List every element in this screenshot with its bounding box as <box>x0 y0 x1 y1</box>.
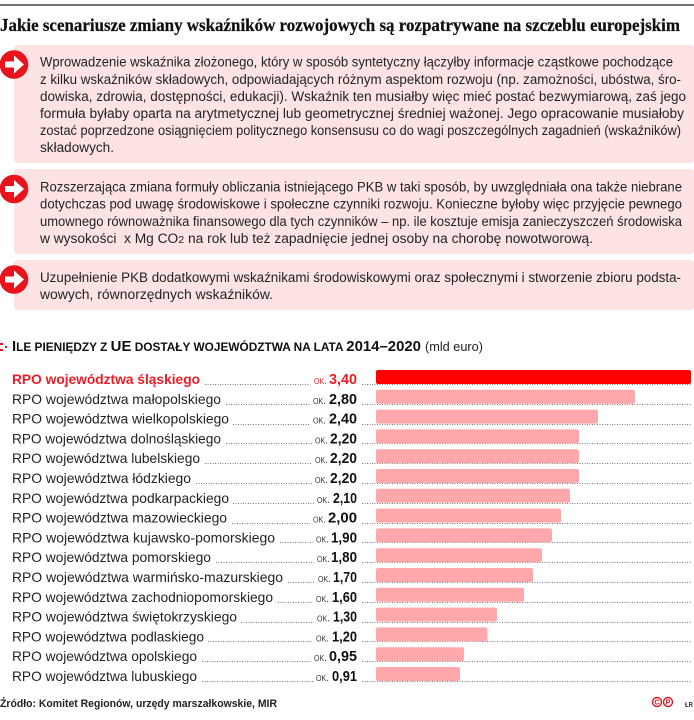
panel: scenario 1 <box>0 45 694 163</box>
row: lubuskie: 0,91 <box>332 668 357 685</box>
text block: scenario 3: Uzupełnienie PKB dodatkowymi wskaźnikami środowiskowymi oraz społecznymi i stworzenie zbioru podsta- <box>40 270 681 285</box>
row: mazowieckie: 2,00 <box>328 510 357 527</box>
row: śląskie: ok. <box>314 375 327 387</box>
row: świętokrzyskie <box>12 608 691 626</box>
row: małopolskie <box>12 390 691 408</box>
icon: red arrow circle 1 <box>0 50 28 79</box>
text block: scenario 1: zostać poprzedzone osiągnięciem politycznego konsensusu co do wagi poszczególnych zagadnień (wskaźników) <box>40 123 681 138</box>
row: zachodniopomorskie: 1,60 <box>332 589 357 606</box>
row: świętokrzyskie: ok. <box>317 613 330 625</box>
row: warmińsko-mazurskie: RPO województwa warmińsko-mazurskiego <box>12 569 283 585</box>
row: pomorskie: ok. <box>317 553 330 565</box>
row: małopolskie: RPO województwa małopolskiego <box>12 391 221 407</box>
logo: CP <box>652 698 672 706</box>
row: opolskie <box>12 647 691 665</box>
row: dolnośląskie: 2,20 <box>330 430 357 447</box>
row: lubelskie: ok. <box>315 454 328 466</box>
row: lubelskie: RPO województwa lubelskiego <box>12 450 200 466</box>
row: lubuskie: RPO województwa lubuskiego <box>12 668 197 684</box>
text block: scenario 1: formuła byłaby oparta na arytmetycznej lub geometrycznej średniej ważonej. Jego opracowanie musiałoby <box>40 106 684 121</box>
row: łódzkie: 2,20 <box>330 470 357 487</box>
row: wielkopolskie: ok. <box>313 415 326 427</box>
text block: scenario 1: Wprowadzenie wskaźnika złożonego, który w sposób syntetyczny łączyłby informacje cząstkowe pochodzące <box>40 54 673 70</box>
text block: scenario 1 <box>40 54 686 155</box>
text block: scenario 2: w wysokości x Mg CO 2 na rok lub też zapadnięcie jednej osoby na chorobę nowotworową. <box>39 231 593 246</box>
icon: section marker <box>0 343 7 351</box>
row: opolskie: ok. <box>314 652 327 664</box>
row: świętokrzyskie: RPO województwa świętokrzyskiego <box>12 609 237 625</box>
row: kujawsko-pomorskie: RPO województwa kujawsko-pomorskiego <box>12 529 275 545</box>
row: warmińsko-mazurskie: ok. <box>318 573 331 585</box>
row: podlaskie: RPO województwa podlaskiego <box>12 628 204 644</box>
row: kujawsko-pomorskie <box>12 528 691 546</box>
row: wielkopolskie: 2,40 <box>329 411 357 428</box>
row: mazowieckie: ok. <box>313 514 326 526</box>
row: łódzkie <box>12 469 691 487</box>
text block: scenario 3 <box>39 270 681 302</box>
row: małopolskie: 2,80 <box>329 391 357 408</box>
icon: red arrow circle 3 <box>0 265 28 294</box>
row: lubelskie: 2,20 <box>330 450 357 467</box>
row: śląskie: 3,40 <box>329 371 357 388</box>
text block: scenario 1: dowiska, zdrowia, dostępności, edukacji). Wskaźnik ten musiałby więc mieć postać bezwymiarową, zaś jego <box>40 89 686 104</box>
logo: CP: P <box>666 700 671 706</box>
row: pomorskie <box>12 548 691 566</box>
bar chart <box>12 370 691 685</box>
row: podkarpackie: 2,10 <box>333 490 357 507</box>
source note: Źródło: Komitet Regionów, urzędy marszałkowskie, MIR <box>0 697 277 710</box>
row: dolnośląskie <box>12 429 691 447</box>
row: mazowieckie: RPO województwa mazowieckiego <box>12 510 227 526</box>
row: podkarpackie: ok. <box>317 494 330 506</box>
row: opolskie: 0,95 <box>329 648 357 665</box>
row: pomorskie: RPO województwa pomorskiego <box>12 549 211 565</box>
row: łódzkie: ok. <box>315 474 328 486</box>
row: dolnośląskie: RPO województwa dolnośląskiego <box>12 430 221 446</box>
row: wielkopolskie <box>12 410 691 428</box>
row: małopolskie: ok. <box>313 395 326 407</box>
logo: CP: C <box>654 700 660 706</box>
panel: scenario 3 <box>0 260 694 310</box>
chart heading: ILE PIENIĘDZY Z UE DOSTAŁY WOJEWÓDZTWA NA LATA 2014–2020 <box>12 339 421 355</box>
icon: red arrow circle 2 <box>0 175 28 203</box>
text block: scenario 2: Rozszerzająca zmiana formuły obliczania istniejącego PKB w taki sposób, by uwzględniała ona także niebrane <box>40 180 682 194</box>
panel: scenario 2 <box>0 169 694 254</box>
row: zachodniopomorskie <box>12 588 691 606</box>
row: świętokrzyskie: 1,30 <box>333 609 357 626</box>
row: kujawsko-pomorskie: 1,90 <box>331 529 357 546</box>
row: warmińsko-mazurskie <box>12 568 691 586</box>
row: śląskie: RPO województwa śląskiego <box>12 371 200 387</box>
row: podlaskie <box>12 627 691 645</box>
row: podkarpackie <box>12 489 691 507</box>
row: dolnośląskie: ok. <box>315 434 328 446</box>
row: zachodniopomorskie: RPO województwa zachodniopomorskiego <box>12 589 273 605</box>
row: warmińsko-mazurskie: 1,70 <box>333 569 357 586</box>
row: zachodniopomorskie: ok. <box>316 593 329 605</box>
text block: scenario 1: składowych. <box>40 140 114 155</box>
text block: scenario 2: dotychczas pod uwagę środowiskowe i społeczne czynniki rozwoju. Konieczne byłoby więc przyjęcie pewnego <box>40 196 682 212</box>
row: pomorskie: 1,80 <box>331 549 357 566</box>
text block: scenario 2: umownego równoważnika finansowego dla tych czynników – np. ile kosztuje emisja zanieczyszczeń środowiska <box>40 214 683 229</box>
row: podlaskie: ok. <box>316 632 329 644</box>
text block: scenario 3: wowych, równorzędnych wskaźników. <box>39 287 273 302</box>
chart heading: (mld euro) <box>425 340 483 354</box>
text block: scenario 2 <box>39 180 683 246</box>
text block: scenario 1: z kilku wskaźników składowych, odpowiadających różnym aspektom rozwoju (np. zamożności, ubóstwa, śro- <box>40 72 681 87</box>
row: łódzkie: RPO województwa łódzkiego <box>12 470 191 486</box>
row: podkarpackie: RPO województwa podkarpackiego <box>12 490 229 506</box>
row: opolskie: RPO województwa opolskiego <box>12 648 197 664</box>
row: podlaskie: 1,20 <box>332 628 357 645</box>
row: lubuskie <box>12 667 691 685</box>
row: śląskie <box>12 370 691 388</box>
row: kujawsko-pomorskie: ok. <box>316 533 329 545</box>
row: lubelskie <box>12 449 691 467</box>
row: mazowieckie <box>12 509 691 527</box>
row: wielkopolskie: RPO województwa wielkopolskiego <box>12 411 229 427</box>
row: lubuskie: ok. <box>316 672 329 684</box>
